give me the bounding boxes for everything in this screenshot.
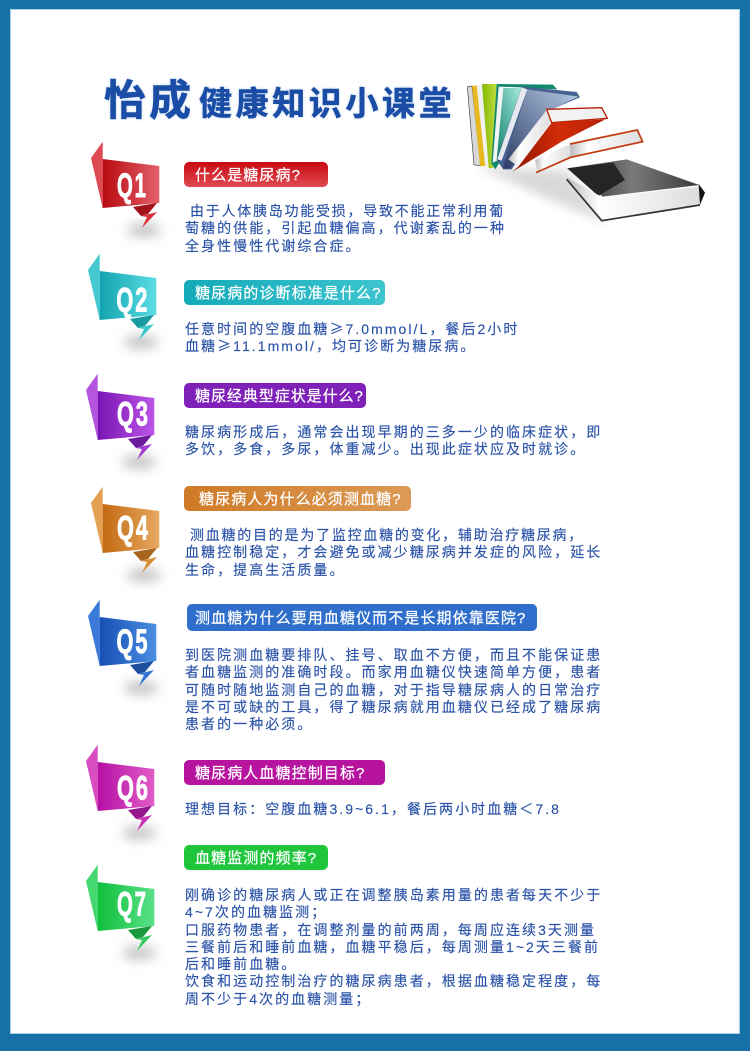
section Q4 — [91, 486, 602, 588]
question pill Q1 — [184, 162, 328, 187]
answer text Q4: 测血糖的目的是为了监控血糖的变化，辅助治疗糖尿病， 血糖控制稳定，才会避免或减少糖尿病并发症的风险，延长 生命，提高生活质量。 — [185, 527, 602, 578]
badge Q5: Q5 — [116, 623, 149, 661]
badge Q5 — [88, 600, 161, 700]
badge Q2: Q2 — [116, 282, 149, 320]
answer text Q2: 任意时间的空腹血糖≥7.0mmol/L，餐后2小时 血糖≥11.1mmol/，均可诊断为糖尿病。 — [185, 319, 519, 356]
illustration: stack of books — [467, 84, 705, 222]
question pill Q7 — [184, 845, 328, 870]
badge Q3 — [86, 374, 159, 474]
question pill Q2: 糖尿病的诊断标准是什么? — [195, 285, 382, 302]
question pill Q5: 测血糖为什么要用血糖仪而不是长期依靠医院? — [195, 610, 526, 627]
question pill Q6 — [184, 760, 385, 785]
section Q5 — [88, 600, 602, 732]
question pill Q5 — [187, 604, 537, 631]
answer text Q5: 到医院测血糖要排队、挂号、取血不方便，而且不能保证患 者血糖监测的准确时段。而家用血糖仪快速简单方便，患者 可随时随地监测自己的血糖，对于指导糖尿病人的日常治疗 是不可或缺的工具，得了糖尿病就用血糖仪已经成了糖尿病 患者的一种必须。 — [185, 647, 602, 732]
answer text Q1: 由于人体胰岛功能受损，导致不能正常利用葡 萄糖的供能，引起血糖偏高，代谢紊乱的一种 全身性慢性代谢综合症。 — [185, 203, 506, 254]
badge Q6: Q6 — [117, 770, 150, 808]
question pill Q4: 糖尿病人为什么必须测血糖? — [199, 491, 402, 508]
badge Q2 — [88, 254, 161, 354]
badge Q1 — [91, 142, 164, 242]
badge Q7 — [86, 864, 159, 966]
section Q6 — [86, 744, 561, 846]
answer text Q6: 理想目标：空腹血糖3.9~6.1，餐后两小时血糖＜7.8 — [185, 801, 561, 817]
answer text Q3: 糖尿病形成后，通常会出现早期的三多一少的临床症状，即 多饮，多食，多尿，体重减少。出现此症状应及时就诊。 — [185, 424, 602, 457]
title — [104, 77, 455, 124]
question pill Q7: 血糖监测的频率? — [195, 850, 317, 867]
section Q1 — [91, 142, 506, 254]
badge Q3: Q3 — [117, 396, 150, 434]
answer text Q7: 刚确诊的糖尿病人或正在调整胰岛素用量的患者每天不少于 4~7次的血糖监测； 口服药物患者，在调整剂量的前两周，每周应连续3天测量 三餐前后和睡前血糖，血糖平稳后，每周测量1~2天三餐前 后和睡前血糖。 饮食和运动控制治疗的糖尿病患者，根据血糖稳定程度，每 周不少于4次的血糖测量； — [185, 887, 602, 1007]
question pill Q1: 什么是糖尿病? — [195, 167, 301, 184]
question pill Q4 — [184, 486, 411, 511]
question pill Q2 — [184, 280, 385, 305]
title: 健康知识小课堂 — [199, 85, 455, 122]
title: 怡成 — [104, 77, 194, 124]
section Q7 — [86, 845, 602, 1007]
question pill Q6: 糖尿病人血糖控制目标? — [195, 765, 365, 782]
question pill Q3 — [184, 383, 366, 408]
question pill Q3: 糖尿经典型症状是什么? — [195, 388, 364, 405]
badge Q7: Q7 — [117, 885, 148, 923]
badge Q4: Q4 — [117, 510, 150, 548]
section Q3 — [86, 374, 602, 474]
badge Q4 — [91, 486, 164, 588]
badge Q6 — [86, 744, 159, 846]
section Q2 — [88, 254, 519, 356]
badge Q1: Q1 — [117, 167, 148, 204]
